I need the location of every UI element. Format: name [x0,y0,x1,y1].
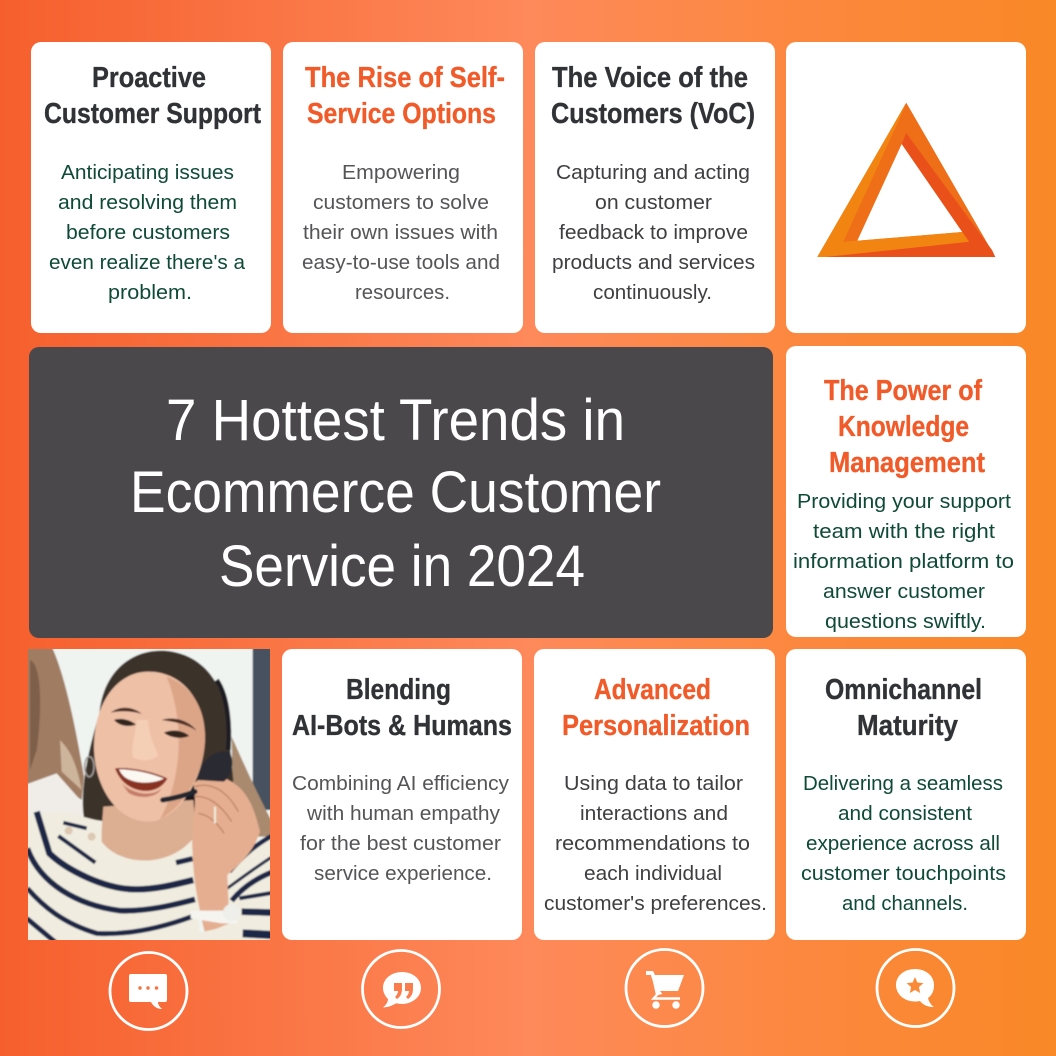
text: Personalization description: interactions and [580,802,728,825]
heading: Omnichannel Maturity: Omnichannel [825,674,982,706]
text: Knowledge management description: answer customer [823,580,985,603]
panel: Advanced Personalization [534,649,775,940]
text: Omnichannel description: experience across all [806,832,1000,855]
text: Voice of the customer description: feedback to improve [559,221,748,244]
text: Knowledge management description: team with the right [813,520,995,543]
text: Self-service description: easy-to-use tools and [302,251,500,274]
icon: shopping cart [626,950,703,1026]
text: Personalization description [544,772,767,915]
heading: Advanced Personalization: Advanced [594,674,711,706]
heading: Advanced Personalization: Personalization [562,710,750,742]
text: Knowledge management description [793,490,1014,633]
text: Knowledge management description: information platform to [793,550,1014,573]
heading: The Power of Knowledge Management: Knowledge [838,411,969,443]
heading: Omnichannel Maturity: Maturity [857,710,958,742]
text: Proactive description: problem. [108,281,192,304]
panel: Omnichannel Maturity [786,649,1026,940]
text: Omnichannel description: and consistent [838,802,972,825]
text: Omnichannel description: Delivering a seamless [803,772,1003,795]
heading: Omnichannel Maturity [825,674,982,742]
heading: The Rise of Self-Service Options: The Rise of Self- [305,62,505,94]
text: Self-service description [302,161,500,304]
text: Knowledge management description: questions swiftly. [825,610,986,633]
panel: Proactive Customer Support [31,42,271,333]
text: Personalization description: recommendations to [555,832,750,855]
panel: The Rise of Self-Service Options [283,42,523,333]
text: Blending description [292,772,510,885]
panel: The Power of Knowledge Management [786,346,1026,637]
text: Self-service description: resources. [355,281,450,304]
heading: Proactive Customer Support [44,62,261,130]
text: Blending description: service experience. [314,862,492,885]
text: Proactive description: Anticipating issues [61,161,234,184]
heading: The Voice of the Customers (VoC): The Voice of the [552,62,748,94]
heading: Blending AI-Bots & Humans: AI-Bots & Humans [292,710,512,742]
text: Voice of the customer description: Capturing and acting [556,161,750,184]
heading: Blending AI-Bots & Humans: Blending [346,674,451,706]
text: Voice of the customer description: on customer [595,191,712,214]
text: Personalization description: each individual [584,862,722,885]
text: Personalization description: customer's preferences. [544,892,767,915]
title [130,388,661,599]
text: Blending description: Combining AI efficiency [292,772,510,795]
text: Voice of the customer description: products and services [552,251,755,274]
text: Omnichannel description [801,772,1006,915]
text: Voice of the customer description: continuously. [593,281,712,304]
text: Proactive description: even realize there's a [49,251,246,274]
text: Blending description: with human empathy [306,802,501,825]
icon: speech bubble with quotation marks [362,950,440,1028]
heading: The Rise of Self-Service Options: Service Options [307,98,496,130]
text: Omnichannel description: and channels. [842,892,968,915]
heading: The Power of Knowledge Management: The Power of [824,375,982,407]
icon: speech bubble with star [877,950,954,1026]
heading: The Power of Knowledge Management [824,375,985,479]
panel: Blending AI-Bots & Humans [282,649,522,940]
text: Blending description: for the best customer [300,832,501,855]
heading: The Voice of the Customers (VoC) [551,62,755,130]
text: Voice of the customer description [552,161,755,304]
panel: The Voice of the Customers [535,42,775,333]
text: Self-service description: their own issues with [303,221,498,244]
heading: Proactive Customer Support: Customer Support [44,98,261,130]
text: Proactive description: before customers [66,221,230,244]
title: Ecommerce Customer [130,460,661,525]
photo: smiling agent with headset [28,649,270,940]
icon: chat bubble with dots [110,952,187,1030]
text: Knowledge management description: Providing your support [797,490,1011,513]
heading: Blending AI-Bots & Humans [292,674,512,742]
text: Omnichannel description: customer touchpoints [801,862,1006,885]
text: Proactive description: and resolving them [58,191,237,214]
text: Self-service description: Empowering [342,161,460,184]
heading: Advanced Personalization [562,674,750,742]
text: Self-service description: customers to solve [313,191,489,214]
heading: Proactive Customer Support: Proactive [92,62,206,94]
text: Proactive description [49,161,246,304]
text: Personalization description: Using data to tailor [564,772,743,795]
title: 7 Hottest Trends in [166,388,625,453]
heading: The Power of Knowledge Management: Management [829,447,985,479]
title: Service in 2024 [219,534,585,599]
icon: triangle logo [817,103,995,257]
heading: The Rise of Self-Service Options [305,62,505,130]
heading: The Voice of the Customers (VoC): Customers (VoC) [551,98,755,130]
panel: logo card [786,42,1026,333]
panel: main title [29,347,773,638]
